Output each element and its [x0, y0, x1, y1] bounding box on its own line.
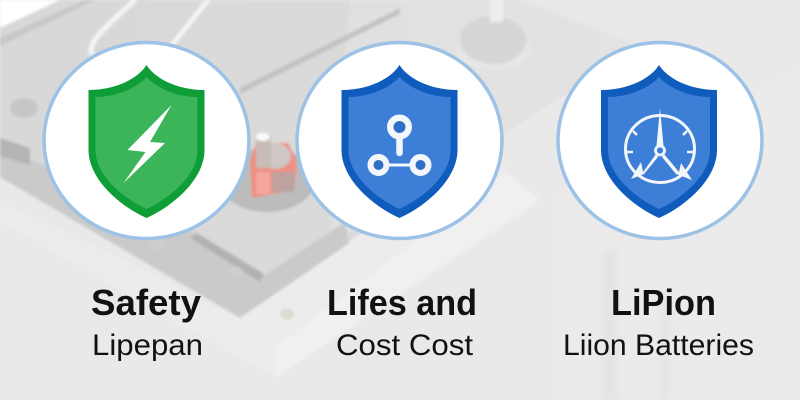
text: Lipepan: Lipepan [92, 329, 203, 362]
text: Liion Batteries: Liion Batteries [563, 329, 754, 362]
circle: safety [44, 42, 249, 238]
text: Cost Cost: Cost Cost [336, 329, 474, 362]
icon: blue shield with gauge dial [601, 65, 717, 218]
heading: LiPion: LiPion [611, 282, 716, 323]
icon: green shield with lightning bolt [88, 65, 204, 218]
panel: safety badge [44, 42, 249, 238]
circle: lifes and cost [297, 42, 502, 238]
panel: lipion badge [558, 42, 762, 238]
panel: lifes and cost badge [297, 42, 502, 238]
heading: Lifes and: Lifes and [327, 282, 477, 323]
icon: blue shield with connected nodes [342, 65, 458, 218]
heading: Safety: Safety [91, 282, 201, 323]
circle: lipion [558, 42, 762, 238]
